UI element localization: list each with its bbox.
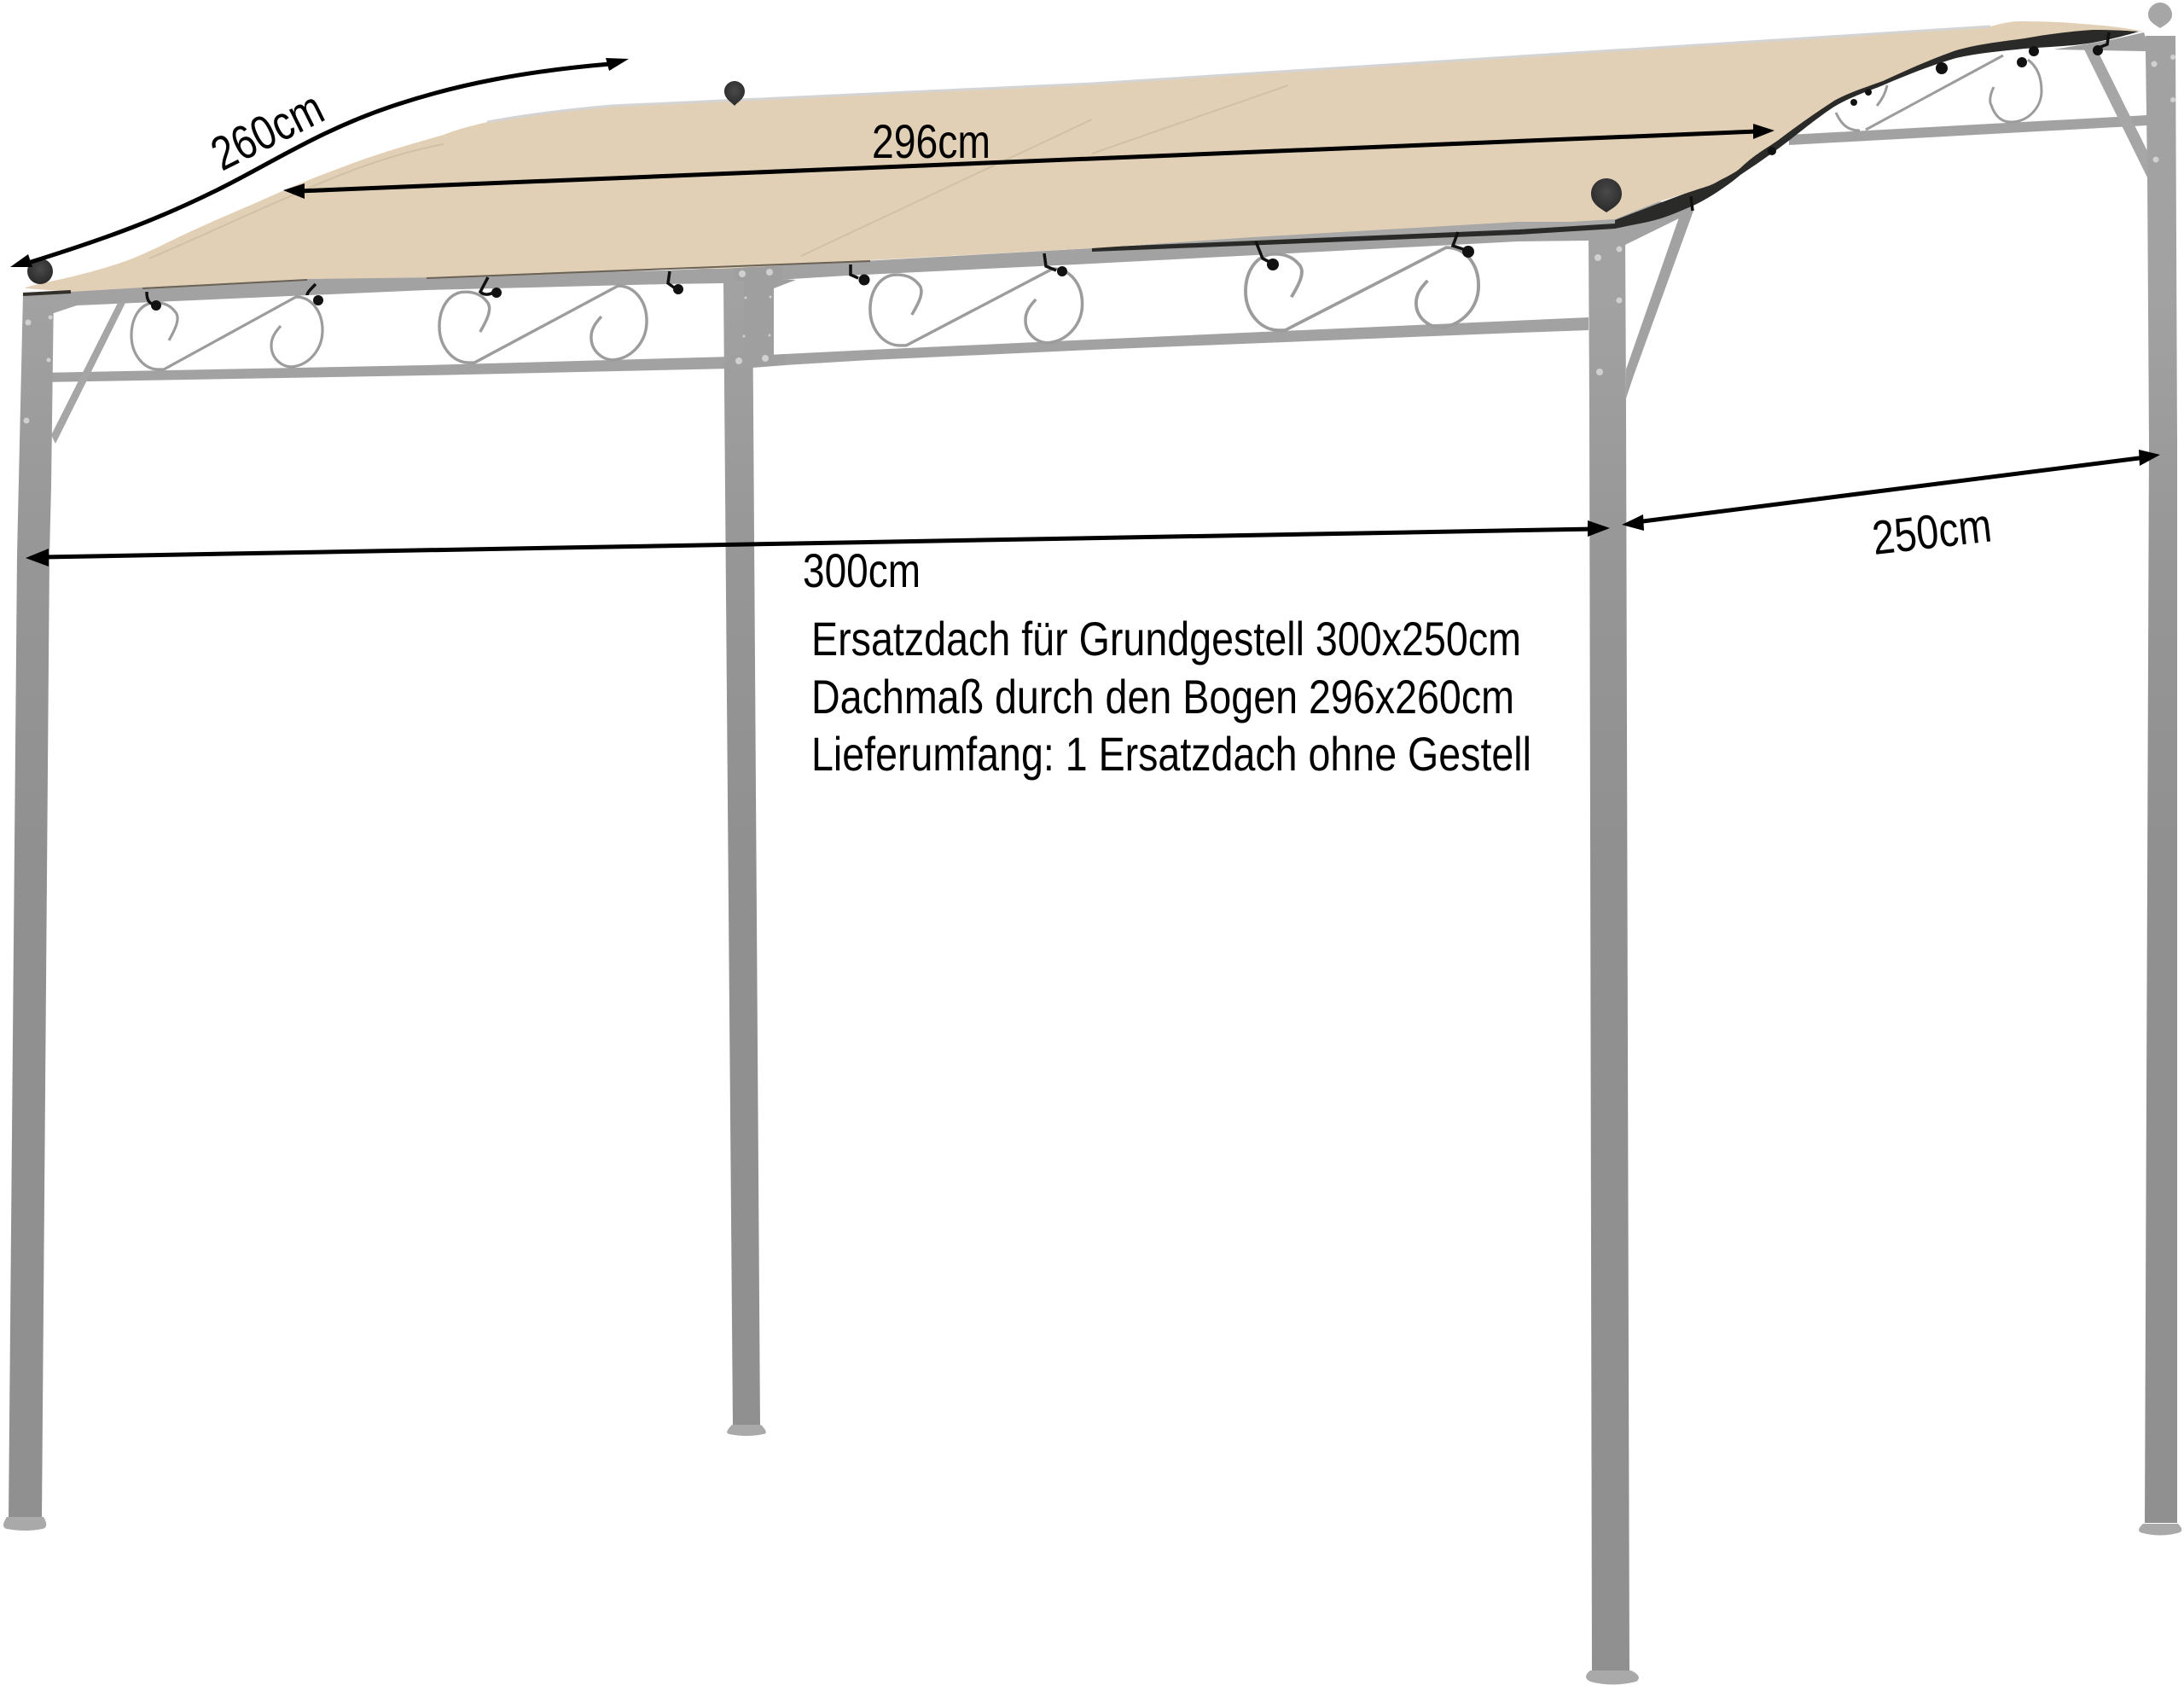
back brace — [2084, 49, 2147, 177]
line 3: Lieferumfang: 1 Ersatzdach ohne Gestell — [811, 727, 1531, 781]
arrow: 260cm curved — [10, 58, 629, 267]
label: 250cm: 250cm — [1869, 497, 1994, 565]
right front gusset — [1615, 199, 1693, 245]
rivets — [24, 55, 2175, 423]
side lower beam — [1789, 115, 2147, 145]
arrow: 250cm — [1622, 450, 2160, 531]
left post — [9, 293, 54, 1520]
arrow: 300cm — [26, 520, 1610, 567]
right back post — [2145, 36, 2177, 1523]
middle joint bracket — [731, 265, 796, 369]
finial back right — [2148, 3, 2172, 28]
line 2: Dachmaß durch den Bogen 296x260cm — [811, 670, 1514, 723]
left brace — [51, 303, 125, 444]
roof dark underside band — [1092, 28, 2139, 252]
label: 296cm: 296cm — [872, 114, 990, 168]
middle post — [723, 282, 760, 1426]
front roof hem shadow — [142, 261, 870, 288]
left front dark edge — [23, 292, 71, 294]
right front post — [1589, 230, 1629, 1674]
description text — [811, 612, 1531, 781]
roof seams — [149, 85, 1288, 259]
finial front right — [1591, 178, 1622, 212]
finial back left — [724, 81, 745, 106]
front upper beam — [23, 228, 1625, 313]
arrow: 296cm — [283, 124, 1774, 199]
right front post foot — [1586, 1670, 1639, 1684]
roof canopy — [23, 21, 2144, 294]
line 1: Ersatzdach für Grundgestell 300x250cm — [811, 612, 1521, 665]
roof top edge highlight — [487, 26, 1990, 122]
finial front left — [27, 259, 53, 284]
right back post foot — [2139, 1524, 2181, 1536]
front lower beam — [41, 317, 1589, 382]
left post foot — [3, 1517, 46, 1531]
scroll ornaments — [131, 55, 2042, 369]
hooks — [147, 32, 2109, 311]
label: 300cm: 300cm — [803, 543, 921, 597]
back beam — [2053, 32, 2150, 51]
middle post foot — [727, 1425, 766, 1436]
roof fabric — [26, 21, 2144, 292]
label: 260cm: 260cm — [202, 80, 332, 181]
right front brace — [1626, 211, 1693, 398]
grey strip under front roof edge — [1092, 201, 1672, 249]
finials — [27, 3, 2172, 284]
